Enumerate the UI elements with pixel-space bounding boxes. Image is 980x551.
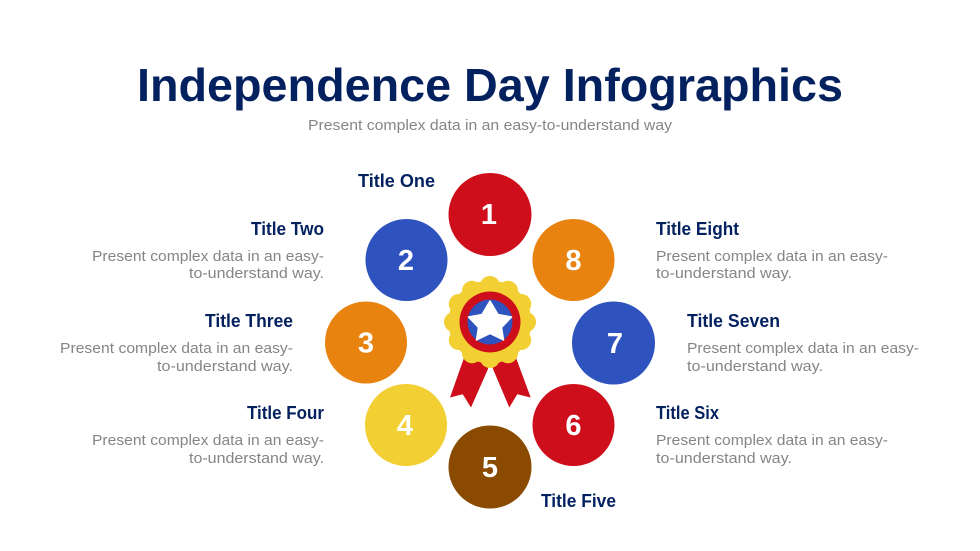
text block: title eight: Title Eight [656,219,739,239]
circle 6 [532,384,614,466]
circle 2: 2 [398,245,414,277]
circle 8 [532,219,614,301]
circle 3: 3 [358,328,374,360]
left ribbon [450,355,488,408]
text block: title seven [687,311,919,375]
scalloped yellow badge [444,276,536,368]
circle 4 [365,384,447,466]
text block: title eight: to-understand way. [656,265,792,282]
red ring [460,292,520,352]
text block: title eight: Present complex data in an easy- [656,248,888,265]
circle 1: 1 [481,199,497,231]
text block: title four: Present complex data in an easy- [92,432,324,449]
text block: title two [92,219,324,282]
icon: medal with ribbons and star [444,276,536,408]
text block: title six: to-understand way. [656,450,792,467]
circle 5: 5 [482,452,498,484]
white star [468,301,512,340]
circle 6: 6 [565,410,582,442]
text block: title seven: Title Seven [687,311,780,331]
circle 5 [448,426,532,508]
text block: title two: Title Two [251,219,324,239]
label: title one: Title One [358,171,435,191]
subtitle: Present complex data in an easy-to-understand way [308,117,673,134]
text block: title two: to-understand way. [189,265,324,282]
text block: title three: Present complex data in an easy- [60,340,293,357]
text block: title four [92,403,324,467]
circle 3 [325,302,407,384]
text block: title seven: to-understand way. [687,358,823,375]
text block: title six [656,403,888,467]
text block: title four: to-understand way. [189,450,324,467]
text block: title six: Present complex data in an easy- [656,432,888,449]
circle 2 [366,219,448,301]
text block: title seven: Present complex data in an easy- [687,340,919,357]
circle 7: 7 [607,328,623,360]
title: Independence Day Infographics [137,59,843,111]
circle 4: 4 [397,410,413,442]
text block: title two: Present complex data in an easy- [92,248,324,265]
text block: title eight [656,219,888,282]
circle 8: 8 [565,245,582,277]
right ribbon [493,355,531,408]
circle 1 [448,173,532,256]
text block: title three: to-understand way. [157,358,293,375]
label: title five: Title Five [541,491,616,511]
circle 7 [572,302,655,384]
text block: title four: Title Four [247,403,324,423]
text block: title three [60,311,293,375]
text block: title three: Title Three [205,311,293,331]
blue disc [468,300,512,344]
text block: title six: Title Six [656,403,719,423]
